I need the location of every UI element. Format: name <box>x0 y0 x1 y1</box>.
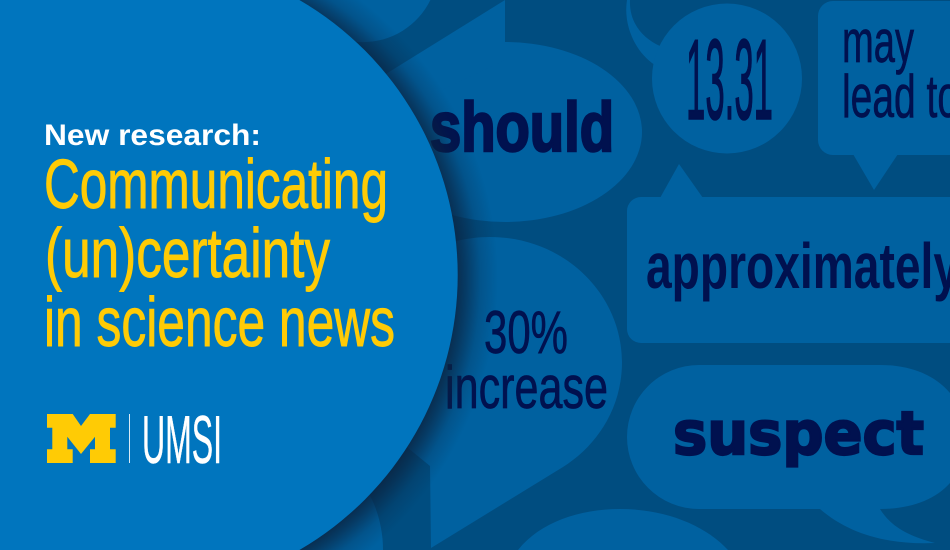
bubble: suspect: suspect <box>673 399 924 469</box>
bubble: 30% increase: increase <box>445 354 608 421</box>
bubble: top left circle <box>296 0 430 42</box>
text: UMSI <box>142 402 222 478</box>
eyebrow: new research: New research: <box>44 119 261 152</box>
bubble: 30% increase <box>355 237 622 548</box>
title: Communicating <box>44 145 388 223</box>
bubble: 30% increase: 30% <box>484 299 568 366</box>
bubble: may lead to <box>818 1 950 190</box>
title: (un)certainty <box>45 214 330 292</box>
bubble: should: should <box>430 88 614 166</box>
bubble: bottom left <box>280 440 383 550</box>
panel: main circle <box>0 0 458 550</box>
logo: UMSI <box>47 402 222 478</box>
bubble: should <box>360 0 642 222</box>
title: in science news <box>44 283 395 361</box>
heading <box>44 119 395 361</box>
bubble: suspect <box>627 365 950 543</box>
panel: speech bubbles <box>280 0 950 550</box>
icon: block M <box>47 414 116 463</box>
bubble: bottom centre <box>518 509 728 550</box>
bubble: 13.31 <box>626 0 802 154</box>
title <box>44 145 395 361</box>
circle shadow <box>0 0 520 550</box>
divider <box>129 414 130 463</box>
bubble: approximately <box>627 164 950 343</box>
